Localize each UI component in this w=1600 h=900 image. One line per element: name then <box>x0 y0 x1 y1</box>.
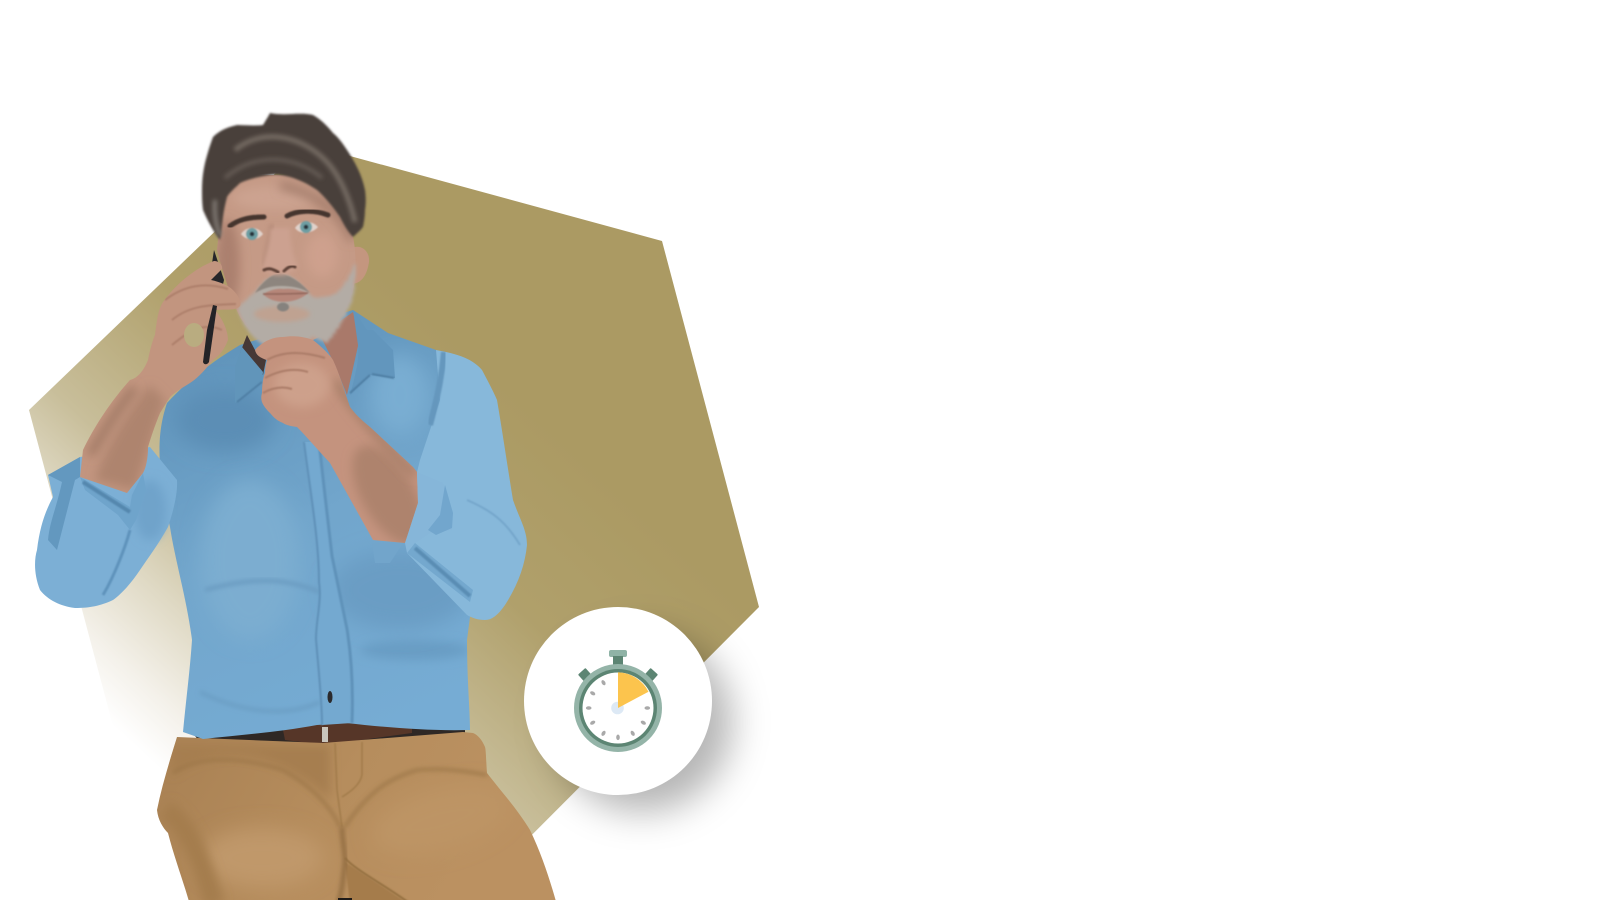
left forearm and phone hand <box>80 261 241 493</box>
hair highlights <box>215 137 355 236</box>
button placket <box>304 442 352 725</box>
white badge circle <box>524 607 712 795</box>
right ear <box>352 247 369 284</box>
right sleeve <box>407 350 527 620</box>
face <box>216 175 356 348</box>
man on the phone <box>35 113 557 900</box>
right rolled cuff <box>372 472 473 602</box>
shirt collar <box>235 310 395 403</box>
icon: stopwatch <box>574 650 662 752</box>
beard <box>238 262 356 348</box>
neck <box>240 312 360 395</box>
trouser shading <box>165 742 515 900</box>
center hub <box>611 702 624 714</box>
belt leather and buckle <box>283 716 412 745</box>
eyebrows <box>230 211 328 226</box>
badge shadow <box>552 632 732 812</box>
left eye <box>241 228 263 240</box>
hair <box>202 113 366 240</box>
elapsed time wedge <box>618 672 648 708</box>
phone <box>203 305 217 364</box>
soul patch <box>277 302 289 312</box>
shirt shading <box>175 355 470 711</box>
chin skin under lip <box>254 306 310 322</box>
chin hand and right forearm <box>255 336 418 543</box>
hour ticks <box>586 679 650 740</box>
moustache <box>255 273 310 293</box>
left rolled cuff <box>80 473 146 530</box>
gap between hand and phone <box>184 323 204 347</box>
hexagon backdrop <box>29 144 759 877</box>
forearm shading <box>90 285 236 490</box>
trousers <box>157 732 557 900</box>
shirt torso <box>160 310 470 739</box>
forearm shading <box>262 352 418 543</box>
phone top behind fingers <box>205 250 224 310</box>
face shading <box>216 185 352 310</box>
callout: stopwatch badge <box>524 607 732 812</box>
infographic canvas <box>29 112 759 900</box>
right eye <box>295 221 318 233</box>
left sleeve <box>35 447 177 608</box>
nose <box>262 228 298 275</box>
belt <box>195 716 465 747</box>
mouth <box>263 289 308 302</box>
